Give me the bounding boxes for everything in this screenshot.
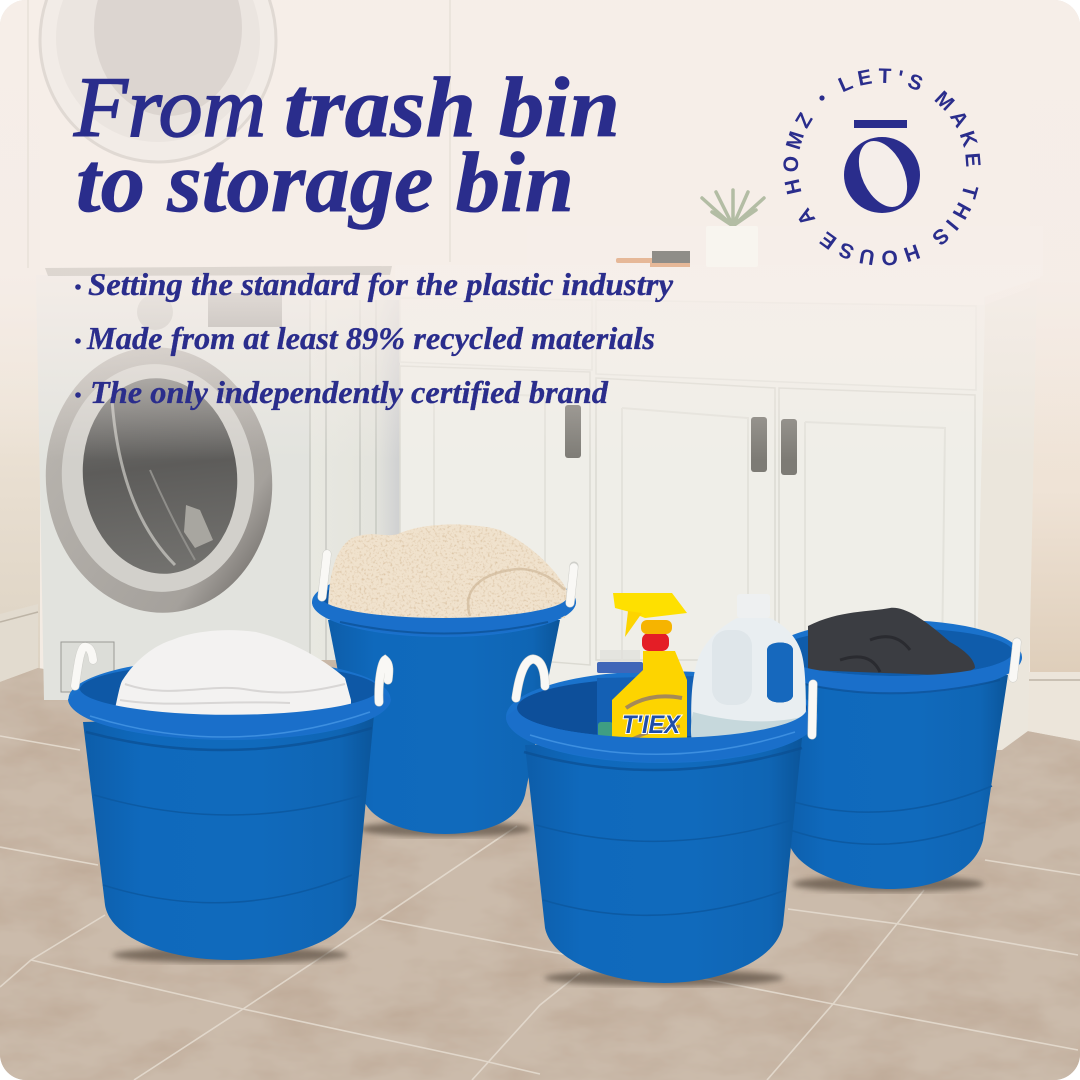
right door xyxy=(779,388,975,660)
left wall strip xyxy=(0,0,40,680)
left door xyxy=(400,366,590,665)
vanity cabinet xyxy=(395,226,1043,750)
tub body xyxy=(525,738,802,983)
title: trash bin xyxy=(284,59,620,155)
tile floor xyxy=(0,640,1080,1080)
bullet: plastic industry standard: Setting the standard for the plastic industry xyxy=(88,266,674,302)
background: wall xyxy=(0,0,1080,760)
tub: back left with knit blanket xyxy=(312,524,576,837)
bullet: recycled materials: Made from at least 89% recycled materials xyxy=(86,320,655,356)
countertop xyxy=(395,265,1042,305)
tub body xyxy=(780,675,1008,889)
blue bottle behind xyxy=(597,650,643,673)
tub rim xyxy=(70,659,390,739)
rope handles xyxy=(322,554,574,603)
lower washer xyxy=(33,275,316,700)
tub rim xyxy=(313,568,575,636)
badge dot xyxy=(819,95,825,101)
bullet list xyxy=(75,266,674,410)
tub rim xyxy=(507,672,817,762)
hair brush xyxy=(616,251,690,267)
title: From xyxy=(73,59,266,155)
cabinet handles xyxy=(565,405,797,475)
front rim xyxy=(312,597,576,636)
white detergent jug xyxy=(691,594,806,742)
front rim xyxy=(68,690,391,739)
middle door xyxy=(596,378,775,660)
backsplash xyxy=(527,226,1043,276)
yellow spray bottle xyxy=(612,593,687,742)
tub body xyxy=(328,620,560,834)
brand badge xyxy=(783,68,981,266)
baseboards xyxy=(0,604,1080,741)
tub: front left with white towel xyxy=(68,630,391,963)
tub: back right with dark cloth xyxy=(768,608,1022,892)
washer door glass xyxy=(73,370,247,582)
dark cloth xyxy=(808,608,975,676)
right wall strip xyxy=(1030,0,1080,700)
bullet: certified brand: The only independently certified brand xyxy=(90,374,609,410)
tub rim xyxy=(769,621,1021,693)
title xyxy=(73,59,620,230)
knit blanket xyxy=(328,524,567,618)
rope handle xyxy=(1013,642,1017,678)
rope handles xyxy=(75,647,389,702)
product label: T'IEX xyxy=(622,711,681,739)
front rim xyxy=(768,652,1022,693)
front rim xyxy=(506,708,818,762)
plant in white pot xyxy=(702,190,764,267)
circular slogan: LET'S MAKE THIS HOUSE A HOMZ xyxy=(783,68,981,266)
washer door ring xyxy=(33,336,285,624)
badge logo mark xyxy=(844,120,920,215)
rope handles xyxy=(516,659,813,735)
washer control panel xyxy=(137,293,282,330)
white towel xyxy=(115,630,351,716)
washed overlay behind text xyxy=(0,0,1080,460)
product label xyxy=(622,696,682,740)
title: to storage bin xyxy=(76,134,574,230)
tub body xyxy=(83,715,374,960)
tub: front centre with cleaning bottles xyxy=(506,593,818,986)
side panel between washer and cabinet xyxy=(310,300,402,660)
washer vent xyxy=(61,642,114,692)
blanket fold xyxy=(468,569,565,616)
drawer fronts xyxy=(400,298,592,370)
green sponge xyxy=(598,722,613,737)
upper stacked dryer, faded xyxy=(28,0,450,276)
